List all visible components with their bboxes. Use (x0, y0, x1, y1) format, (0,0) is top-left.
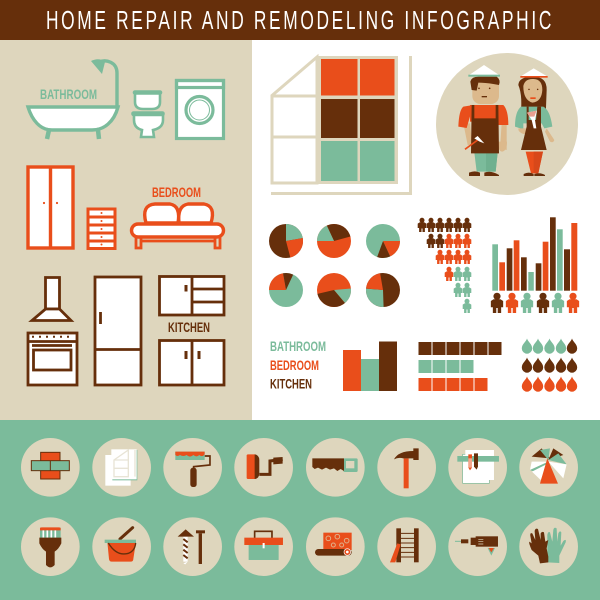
icon: wardrobe (28, 167, 73, 248)
icon: stove with oven (28, 333, 77, 385)
pictogram: triangle of people (418, 218, 471, 313)
label: bedroom: BEDROOM (152, 184, 201, 200)
square unit bars (418, 342, 502, 391)
pie 2 (317, 224, 351, 258)
pie 4 (269, 273, 303, 307)
tool icons: right half (306, 438, 578, 576)
title bar (0, 0, 600, 40)
icon: sofa (132, 204, 224, 248)
panel: left room background (0, 40, 252, 420)
icon: upper kitchen cabinet (160, 276, 224, 315)
icon: blueprints (92, 438, 151, 497)
icon: chest of drawers (88, 209, 115, 248)
legend: KITCHEN (270, 376, 312, 392)
tool icons: left half (21, 438, 293, 576)
panel: bedroom furniture (28, 167, 224, 248)
small column chart (343, 342, 397, 391)
icon: wallpaper roll (306, 517, 365, 576)
icon: drill (448, 517, 507, 576)
window with coloured panes (271, 56, 410, 194)
icon: screw and nail (163, 517, 222, 576)
pie 1 (269, 224, 303, 258)
label: kitchen: KITCHEN (168, 319, 210, 335)
legend: BEDROOM (270, 357, 319, 373)
legend (270, 338, 326, 392)
label: bathroom: BATHROOM (40, 86, 97, 102)
panel: bottom tools background (0, 420, 600, 600)
icon: wall roller (234, 438, 293, 497)
woman worker (515, 68, 554, 176)
icon: hammer (377, 438, 436, 497)
icon: refrigerator (95, 277, 141, 385)
illustration: two workers in a circle (436, 53, 578, 195)
panel: bathroom fixtures (28, 59, 224, 139)
icon: paint brush (21, 517, 80, 576)
man worker (458, 65, 508, 176)
icon: bricks (21, 438, 80, 497)
pie 5 (317, 273, 351, 307)
icon: paint bucket (92, 517, 151, 576)
icon: ladder (377, 517, 436, 576)
icon: bathtub with shower (28, 59, 118, 139)
legend: BATHROOM (270, 338, 326, 354)
pie 3 (366, 224, 400, 258)
panel: kitchen appliances (28, 276, 224, 385)
icon: colour swatch fan (519, 438, 578, 497)
water drops pictogram (522, 338, 577, 392)
bar chart with people axis (491, 217, 579, 313)
icon: toilet (132, 92, 164, 137)
icon: ruler, paper and pencils (448, 438, 507, 497)
icon: lower kitchen cabinet (160, 340, 224, 385)
icon: toolbox (234, 517, 293, 576)
icon: work gloves (519, 517, 578, 576)
pie 6 (366, 273, 400, 307)
icon: paint roller (163, 438, 222, 497)
icon: saw (306, 438, 365, 497)
icon: washing machine (176, 80, 224, 138)
pie charts (269, 224, 400, 307)
icon: cooker hood (32, 278, 71, 320)
